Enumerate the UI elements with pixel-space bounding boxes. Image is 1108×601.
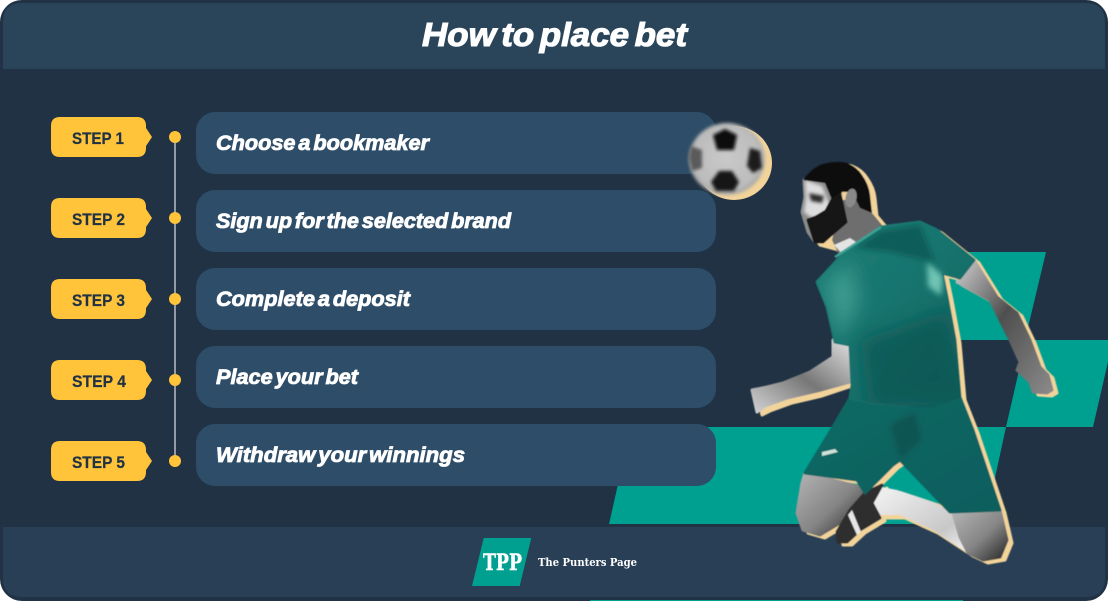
ear <box>844 188 858 208</box>
teal background shapes <box>609 252 1108 524</box>
step 2 badge <box>51 198 152 238</box>
step 1 label: STEP 1 <box>72 129 124 148</box>
shorts <box>805 397 1000 512</box>
step 4 badge <box>51 360 152 400</box>
step 3 row <box>51 268 716 330</box>
icon: football <box>689 123 772 200</box>
footer band <box>3 527 1105 597</box>
beard <box>808 194 846 242</box>
step 5 text: Withdraw your winnings <box>216 444 465 467</box>
eye <box>809 193 824 203</box>
step 2 panel <box>196 190 716 252</box>
step 1 row <box>51 112 716 174</box>
logo mark <box>472 538 531 586</box>
step 2 row <box>51 190 716 252</box>
step 4 row <box>51 346 716 408</box>
step 1 panel <box>196 112 716 174</box>
left arm <box>752 340 850 412</box>
step 3 text: Complete a deposit <box>216 288 411 311</box>
sock <box>872 487 968 553</box>
shirt <box>817 222 974 408</box>
timeline connector <box>174 137 176 461</box>
step 1 text: Choose a bookmaker <box>216 132 431 155</box>
step 5 dot <box>169 455 181 467</box>
step 2 dot <box>169 212 181 224</box>
bottom teal strip <box>590 600 963 601</box>
brand name: The Punters Page <box>538 556 637 569</box>
step 5 label: STEP 5 <box>72 453 125 472</box>
right arm <box>957 260 1052 393</box>
step 5 row <box>51 424 716 486</box>
step 2 text: Sign up for the selected brand <box>216 210 512 233</box>
step 4 text: Place your bet <box>216 366 359 389</box>
step 4 panel <box>196 346 716 408</box>
hair <box>803 162 872 213</box>
step 3 panel <box>196 268 716 330</box>
right knee <box>953 510 1007 560</box>
lit cheek <box>804 180 831 218</box>
player <box>752 162 1057 563</box>
player cream outline <box>757 165 1057 563</box>
shoe <box>837 485 882 542</box>
step 1 dot <box>169 131 181 143</box>
shirt shading <box>825 225 965 410</box>
step 3 label: STEP 3 <box>72 291 125 310</box>
face <box>802 178 838 242</box>
step 5 panel <box>196 424 716 486</box>
step 4 label: STEP 4 <box>72 372 126 391</box>
step 3 dot <box>169 293 181 305</box>
step 2 label: STEP 2 <box>72 210 125 229</box>
logo initials: TPP <box>483 550 522 576</box>
header band <box>3 3 1105 69</box>
title: How to place bet <box>422 16 689 53</box>
left knee <box>797 473 863 535</box>
step 5 badge <box>51 441 152 481</box>
step 1 badge <box>51 117 152 157</box>
neck <box>832 200 882 257</box>
step 4 dot <box>169 374 181 386</box>
logo <box>472 538 637 586</box>
step 3 badge <box>51 279 152 319</box>
